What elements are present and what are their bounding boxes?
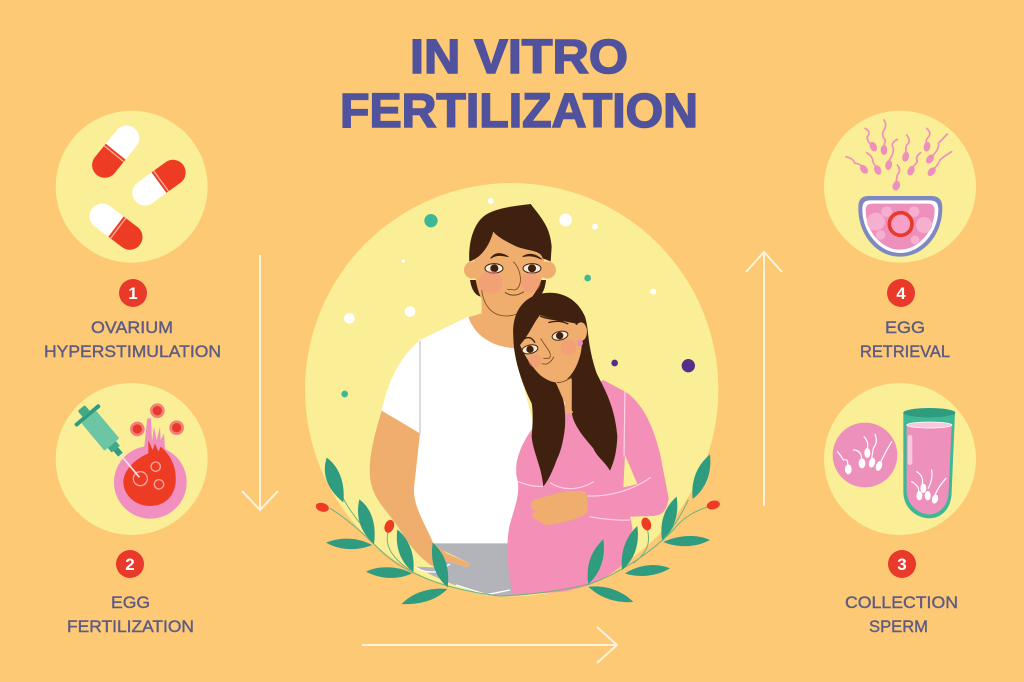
step 2 label — [67, 593, 194, 636]
capsule top — [87, 120, 144, 183]
title: IN VITRO — [410, 31, 628, 84]
syringe — [69, 398, 152, 487]
step 4 number badge: 4 — [896, 284, 906, 303]
test tube — [903, 408, 955, 518]
step 3 number badge — [888, 550, 916, 578]
step 1 label: OVARIUM — [91, 318, 173, 337]
sperm cluster — [846, 120, 952, 192]
step 4 label: EGG — [885, 318, 925, 337]
step 2 label: EGG — [111, 593, 150, 612]
step 1 number badge — [119, 279, 147, 307]
egg dish — [858, 196, 942, 257]
decorative dots — [341, 198, 695, 397]
step 4 number badge — [887, 279, 915, 307]
capsule middle — [127, 155, 191, 211]
ovary — [114, 403, 187, 519]
step 2 number badge: 2 — [125, 555, 135, 574]
step 3 label: SPERM — [869, 617, 928, 636]
step 4 label — [860, 318, 950, 361]
sample circle — [833, 423, 897, 487]
step 3 label — [845, 593, 958, 636]
step 3 icon: sperm collection — [824, 383, 976, 535]
capsule bottom — [84, 198, 148, 255]
step 4 label: RETRIEVAL — [860, 342, 950, 361]
step 4 icon: sperm and egg — [824, 111, 976, 263]
man — [370, 204, 556, 595]
step 2 number badge — [116, 550, 144, 578]
title: FERTILIZATION — [340, 85, 698, 138]
step 1 icon: capsules — [56, 111, 208, 263]
wreath of leaves — [315, 454, 721, 604]
arrow: down — [242, 255, 278, 510]
title — [340, 31, 698, 138]
woman — [507, 293, 669, 595]
step 1 label — [44, 318, 221, 361]
step 1 number badge: 1 — [128, 284, 138, 303]
step 2 icon: syringe and ovary — [56, 383, 208, 535]
step 3 label: COLLECTION — [845, 593, 958, 612]
step 1 label: HYPERSTIMULATION — [44, 342, 221, 361]
background circle — [305, 183, 718, 596]
arrow: right — [362, 627, 617, 663]
arrow: up — [746, 252, 782, 506]
step 2 label: FERTILIZATION — [67, 617, 194, 636]
step 3 number badge: 3 — [897, 555, 907, 574]
central illustration: couple — [305, 183, 721, 604]
